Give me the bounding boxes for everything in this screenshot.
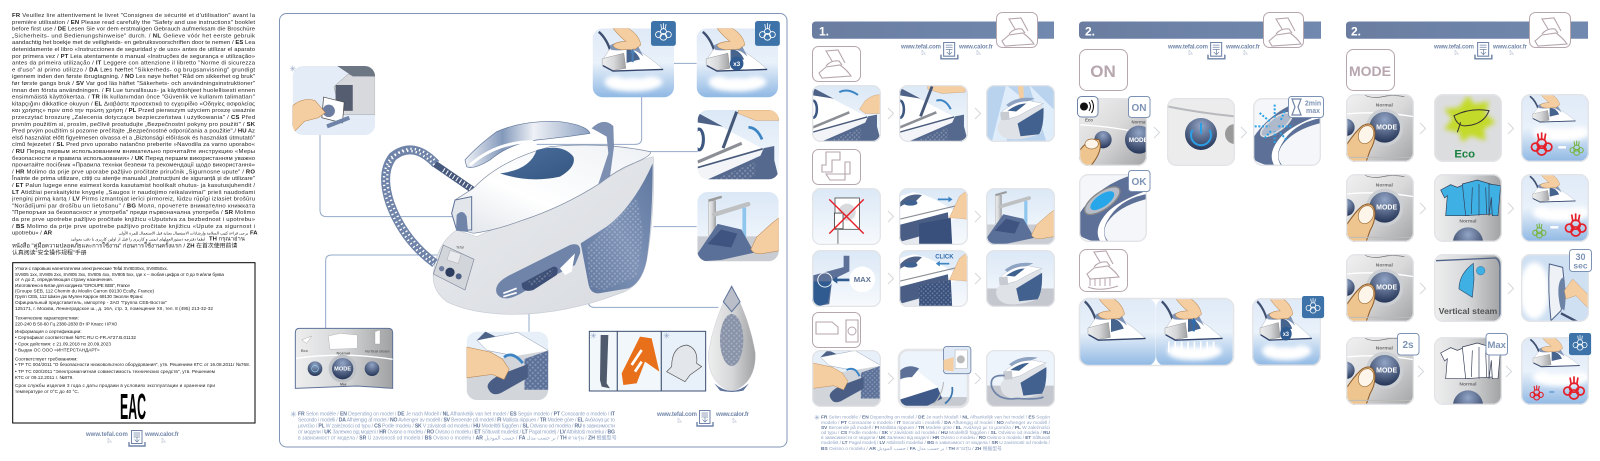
thumbnail: press mode: Normal xyxy=(1376,182,1394,188)
arrow xyxy=(1508,203,1514,214)
badge: ON: ON xyxy=(1132,103,1146,114)
panel: product overview frame xyxy=(280,14,787,447)
blue side stripe xyxy=(496,244,580,298)
thumbnail: hold mode xyxy=(1346,337,1414,405)
panel: multilingual safety notice: kitapçığını dikkatlice okuyun / EL Διαβάστε προσεκτικά το εγχειρίδιο «Οδηγίες ασφαλείας xyxy=(12,100,255,107)
panel: Russian compliance box: 220-240 В 50-60 Гц 2380-2830 Вт IP Класс I IPX0 xyxy=(15,322,117,326)
panel: multilingual safety notice: da pre prve upotrebe pažljivo pročitate knjižicu «Uputstva za bezbednost i upotrebu» xyxy=(12,217,256,223)
badge: ON xyxy=(1128,96,1150,118)
thumbnail: fill tank xyxy=(986,188,1055,245)
thumbnail: press power button: MODE xyxy=(1129,137,1148,144)
section 2 MODE: header bar: 2. xyxy=(1351,24,1361,38)
thumbnail: lifting flap, step 2 xyxy=(896,85,968,142)
badge: Max: Max xyxy=(1487,340,1507,351)
panel: multilingual safety notice: igennem inden den første ibrugtagning. / NO Les nøye heftet "Råd om sikkerhet og bruk" xyxy=(12,73,255,80)
panel: multilingual safety notice: „Sicherheits- und Bedienungshinweise" durch. / NL Gelieve vóór het eerste gebruik xyxy=(12,33,255,39)
panel: Russian compliance box: 125171, г. Москва, Ленинградское ш., д. 16А, стр. 3, помещение XII, тел. 8 (495) 213-32-32 xyxy=(15,306,213,311)
panel: multilingual safety notice: før første gangs bruk / SV Var god läs häftet "Säkerhets- och användningsinstruktioner" xyxy=(12,81,255,87)
panel: Russian compliance box: Утюги с паровым нагнетателем электрические Tefal SV8030xx, SV8050xx. xyxy=(15,266,168,271)
panel: Russian compliance box: SV805 1xx, SV805 2xx, SV805 3xx, SV805 4xx, SV805 5xx, где х – любая цифра от 0 до 9 и/или буква xyxy=(15,272,224,277)
icon: iron steaming xyxy=(1080,250,1128,292)
badge: 2s xyxy=(1398,334,1419,355)
websites: mode section: www.tefal.com xyxy=(1433,44,1474,50)
arrow xyxy=(1420,283,1426,294)
thumbnail: generator with cord xyxy=(986,350,1055,407)
thumbnail: press mode: MODE xyxy=(1376,204,1397,211)
thumbnail: press mode: MODE xyxy=(1376,284,1397,291)
thumbnail: turning dial xyxy=(467,332,548,400)
arrow xyxy=(975,108,980,119)
thumbnail: steam lower xyxy=(1521,94,1590,162)
thumbnail: press mode xyxy=(1346,174,1414,242)
section 1 footnote: SV Beroende på modell / FI Mallista riippuen / TR Modele göre / EL Ανάλογα με το μοντέλο / PL W zależności xyxy=(821,424,1050,431)
row: Max mode xyxy=(1346,333,1592,405)
panel: multilingual safety notice: przeczytać broszurę „Zalecenia dotyczące bezpieczeństwa i użytkowania" / CS Před xyxy=(12,115,255,121)
websites: left column xyxy=(85,430,180,446)
base control panel xyxy=(433,245,474,290)
icon: steam boost badge xyxy=(755,21,780,46)
thumbnail: power button lit xyxy=(1167,98,1235,166)
panel: multilingual safety notice: című fejezetet / SL Pred prvo uporabo natančno preberite »Navodila za varno uporabo« xyxy=(12,142,256,148)
panel: multilingual safety notice: első használat előtt figyelmesen olvassa el a „Biztonsági előírások és használati útmutató" xyxy=(12,135,255,141)
websites: overview panel: www.tefal.com xyxy=(656,412,697,418)
accessories xyxy=(589,331,706,391)
badge: 30 sec: 30 xyxy=(1575,252,1586,262)
badge: 2s: 2s xyxy=(1402,340,1414,351)
badge: Max xyxy=(1486,334,1508,355)
arrow xyxy=(1508,283,1514,294)
panel: multilingual safety notice: LT Atidžiai perskaitykite knygelę „Saugos ir naudojimo reikalavimai" prieš naudodami xyxy=(12,190,255,196)
base control panel: Tefal xyxy=(456,246,464,250)
thumbnail: steam higher xyxy=(1521,174,1590,242)
panel: multilingual safety notice: / ET Palun lugege enne esimest korda kasutamist hoolikalt ohutus- ja kasutusjuhendit / xyxy=(12,183,255,189)
thumbnail: remove tank xyxy=(899,188,968,245)
badge: 30 sec: sec xyxy=(1573,260,1588,270)
panel: multilingual safety notice: antes da primeira utilização / IT Leggere con attenzione il libretto "Norme di sicurezza xyxy=(12,61,256,67)
section 1: header bar: 1. xyxy=(819,24,829,38)
thumbnail: unlocking dial xyxy=(812,350,881,407)
thumbnail: press mode xyxy=(1346,94,1414,162)
panel: Russian compliance box: от A до Z, определяющая страну назначения. xyxy=(15,277,113,282)
thumbnail: plugging in xyxy=(899,347,971,407)
main footnote: от модели / UK Залежно від моделі / HR Ovisno o modelu / RO Ovisno o modelu / ET Sõltuvalt mudelist / LT Pagal modelį / LV Atbilstoši modeliui / BG xyxy=(298,430,615,436)
icon: MODE label: MODE xyxy=(1349,63,1391,79)
icon: max steam badge xyxy=(1569,333,1591,355)
panel: Russian compliance box: • ТР ТС 004/2011 "О безопасности низковольтного оборудования", утв. Решением КТС от 16.08.2011г №768. xyxy=(15,362,250,367)
panel: multilingual safety notice: before first use / DE Lesen Sie vor dem erstmaligen Gebrauch aufmerksam die Broschüre xyxy=(12,27,256,33)
water tank xyxy=(581,163,653,293)
icon: tank xyxy=(812,150,860,184)
badge: 2 min max: 2min xyxy=(1305,100,1321,108)
steam generator base xyxy=(433,157,654,314)
panel: multilingual safety notice: прочитайте посібник «Правила техніки безпеки та рекомендації щодо використання» xyxy=(12,162,256,169)
hose xyxy=(384,149,477,264)
thumbnail: indicator steady xyxy=(1079,174,1147,242)
panel: Russian compliance box: Соответствует требованиям: xyxy=(15,356,78,362)
panel: Russian compliance box: Изготовлено в Китае для холдинга "GROUPE SEB", France xyxy=(15,283,130,288)
thumbnail: filling tank at faucet xyxy=(697,192,779,261)
icon: ON label xyxy=(1080,50,1128,90)
iron handle xyxy=(465,121,614,184)
thumbnail: Vertical steam selected: Vertical steam xyxy=(1439,306,1498,316)
thumbnail: hold mode: MODE xyxy=(1376,367,1397,374)
panel: Russian compliance box: Срок службы изделия 3 года с даты продажи в условиях эксплуатации и хранении при xyxy=(15,383,215,388)
thumbnail: steam boost x3: x3 xyxy=(1283,332,1290,338)
thumbnail: Normal selected xyxy=(1434,174,1502,242)
panel: multilingual safety notice: يرجى قراءة كتيب السلامة وإرشادات الاستعمال بعناية قبل الاستعمال للمرة الأولى xyxy=(119,231,248,237)
panel: multilingual safety notice: aandachtig het boekje met de veiligheids- en gebruiksvoorschriften door te nemen / ES Lea xyxy=(12,40,256,46)
row: Normal mode xyxy=(1346,174,1589,242)
panel: multilingual safety notice: και χρήσης» πριν από την πρώτη χρήση / PL Przed pierwszym użyciem proszę uważnie xyxy=(12,107,256,114)
panel: multilingual safety notice: e d'uso" al primo utilizzo / DA Læs hæftet "Sikkerheds- og brugsanvisning" grundigt xyxy=(12,67,255,73)
panel: Russian compliance box: Информация о сертификации: xyxy=(15,329,82,334)
icon: MODE label xyxy=(1346,50,1394,90)
panel: Russian compliance box: • Срок действия: с 21.09.2018 по 20.09.2023 xyxy=(15,340,111,346)
panel: multilingual safety notice xyxy=(11,13,258,256)
thumbnail: press mode: Normal xyxy=(1376,262,1394,268)
panel: Russian compliance box: • Сертификат соответствия №ТС RU C-FR.АГ27.В.01132 xyxy=(15,335,136,340)
section 1 footnote: ✳ xyxy=(814,414,820,422)
main footnote xyxy=(290,410,617,442)
icon: beep sound xyxy=(1078,96,1098,117)
thumbnail: press power button: Normal xyxy=(1132,120,1146,125)
thumbnail: press power button xyxy=(1079,98,1153,166)
section 1 footnote: modelo / PT Consoante o modelo / IT Secondo i modelli / DA Afhængig af model / NO Avhenger av modell / xyxy=(821,420,1051,426)
thumbnail: maximum steam xyxy=(1521,337,1590,405)
badge: OK: OK xyxy=(1132,177,1147,188)
panel: multilingual safety notice: لطفا دفترچه دستورالعملهای ایمنی و کاربری را قبل از اولین کاربری با دقت بخوانید xyxy=(71,237,205,242)
icon: ON label: ON xyxy=(1090,62,1116,81)
control panel xyxy=(295,328,393,388)
arrow xyxy=(1154,127,1160,138)
panel: Russian compliance box: • Выдан ОС ООО «ИНТЕРСТАНДАРТ» xyxy=(15,348,100,352)
control panel: Max xyxy=(340,383,347,387)
control panel: Normal xyxy=(336,351,350,356)
panel: Russian compliance box: Групп СЕБ, 112 Шмэн дю Мулен Каррон 69130 Эколли Франс xyxy=(15,294,144,299)
main footnote: Secondo i modelli / DA Afhængig af model / NO Avhenger av modell / SV Beroende på modell / FI Mallista riippuen / TR Modele göre / EL Ανάλογα με το xyxy=(298,416,615,424)
star marker: ✳ xyxy=(289,65,296,74)
overview illustration: steam generator and callouts xyxy=(289,21,780,400)
badge: 2 min max: max xyxy=(1306,108,1320,115)
thumbnail: press mode: MODE xyxy=(1376,124,1397,131)
thumbnail: hold mode: Normal xyxy=(1376,345,1394,351)
panel: multilingual safety notice: หนังสือ "คู่มือความปลอดภัยและการใช้งาน" ก่อนการใช้งานครั้งแรก / ZH 在首次使用前请 xyxy=(12,239,237,249)
connector lines xyxy=(320,63,718,332)
iron rear cap xyxy=(452,197,472,232)
thumbnail: Eco selected xyxy=(1434,94,1502,162)
websites: mode section: www.calor.fr xyxy=(1492,44,1528,50)
panel: multilingual safety notice: Înainte de prima utilizare, citiți cu atenție manualul „Instrucțiuni de siguranță și de utilizare" xyxy=(11,175,255,182)
panel: multilingual safety notice: detenidamente el libro «Instrucciones de seguridad y de uso» antes de utilizar el aparato xyxy=(12,47,256,53)
panel: multilingual safety notice: Pred prvým použitím si pozorne prečítajte „Bezpečnostné odporúčania a použitie"./ HU Az xyxy=(12,129,255,135)
icon: hand on iron xyxy=(1530,12,1570,48)
arrow xyxy=(975,373,980,384)
section 2 ON: header bar xyxy=(1079,22,1321,39)
arrow xyxy=(1506,366,1512,377)
websites: section 2: www.tefal.com xyxy=(1167,44,1208,50)
panel: Russian compliance box xyxy=(13,263,255,427)
panel: Russian compliance box: Официальный представитель, импортёр - ЗАО "Группа СЕБ-Восток" xyxy=(15,299,167,305)
websites: left column: www.tefal.com xyxy=(85,432,128,438)
websites: section 2: www.calor.fr xyxy=(1225,44,1261,50)
panel: multilingual safety notice: / HR Molimo da prije prve uporabe pažljivo pročitate priručnik „Sigurnosne upute" / RO xyxy=(12,169,255,175)
thumbnail: indicator flashing xyxy=(1253,98,1321,166)
icon: iron on base xyxy=(812,46,860,82)
section 1 footnote: BS Ovisno o modelu / AR حسب الموديل / FA بر حسب مدل / TH ตามรุ่น / ZH 根据型号 xyxy=(821,445,1002,452)
control panel: MODE xyxy=(334,367,351,373)
websites: overview panel: www.calor.fr xyxy=(715,412,750,418)
panel: multilingual safety notice: безопасности и правила использования» / UK Перед першим використанням уважно xyxy=(12,156,256,162)
icon: steam boost badge xyxy=(1302,296,1324,318)
arrow xyxy=(888,211,894,222)
panel: multilingual safety notice: FR Veuillez lire attentivement le livret "Consignes de sécurité et d'utilisation" avant la xyxy=(12,13,256,19)
badge: 2 min max xyxy=(1288,96,1324,118)
panel: multilingual safety notice: prvním použitím si, prosím, pečlivě prostudujte „Bezpečnostní pokyny pro použití" / SK xyxy=(12,122,256,128)
thumbnail: press power button: Eco xyxy=(1085,117,1093,122)
accessories: ✳ xyxy=(663,331,670,340)
thumbnail: triple press burst xyxy=(697,28,778,97)
thumbnail: opening flap xyxy=(695,110,779,179)
panel: multilingual safety notice: TH กรุณาอ่าน xyxy=(209,236,245,243)
accessories: ✳ xyxy=(590,331,597,340)
panel: Russian compliance box: (Groupe SEB, 112 Chemin du Moulin Carron 69130 Ecully, France) xyxy=(15,288,154,294)
arrow xyxy=(888,273,894,284)
websites: overview panel xyxy=(656,410,750,426)
icon: steam badge xyxy=(651,21,676,46)
section 1: header bar xyxy=(812,22,1054,39)
panel: multilingual safety notice: įrenginį pirmą kartą / LV Pirms izmantojat ierīci pirmoreiz, lūdzu rūpīgi izlasiet brošūru xyxy=(12,197,255,203)
panel: multilingual safety notice: / BS Molimo da prije prve upotrebe pažljivo pročitate knjižicu «Upute za sigurnost i xyxy=(12,224,255,230)
panel: multilingual safety notice: FA xyxy=(250,231,258,237)
thumbnail: Eco selected: Eco xyxy=(1454,148,1475,160)
arrow xyxy=(975,273,980,284)
section 2 ON: header bar: 2. xyxy=(1085,24,1095,38)
section 1 footnote: od typu / CS Podle modelu / SK V závislosti od modelu / HU Modelltől függően / SL Odvisno od modela / RU xyxy=(821,430,1051,436)
section 1 footnote xyxy=(814,414,1051,452)
icon: plug in socket xyxy=(812,312,860,348)
main footnote: FR Selon modèle / EN Depending on model / DE Je nach Modell / NL Afhankelijk van het model / ES Según modelo / PT Consoante o modelo / IT xyxy=(298,412,616,418)
badge: 30 sec xyxy=(1570,250,1592,272)
websites: section 1: www.tefal.com xyxy=(900,44,941,50)
panel: multilingual safety notice: innan den första användningen. / FI Lue turvallisuus- ja käyttöohjeet huolellisesti ennen xyxy=(12,88,255,94)
badge: OK xyxy=(1128,170,1150,192)
websites: section 2 xyxy=(1167,43,1261,59)
panel: multilingual safety notice: 认真阅读“安全操作规程”手册 xyxy=(12,248,87,256)
control panel: Eco xyxy=(301,349,308,353)
websites: mode section xyxy=(1433,43,1528,59)
arrow xyxy=(1420,123,1426,134)
panel: multilingual safety notice: / RU Перед первым использованием внимательно прочитайте инструкцию «Меры xyxy=(12,148,255,155)
section 2 MODE: header bar xyxy=(1346,22,1588,39)
panel: multilingual safety notice: por primera vez / PT Leia atentamente o manual «Instruções de segurança e utilização» xyxy=(12,54,256,60)
main footnote: ✳ xyxy=(290,410,297,419)
icon: hand on iron xyxy=(1264,12,1304,48)
arrow xyxy=(1508,123,1514,134)
arrow xyxy=(1418,366,1424,377)
section 1 footnote: в зависимости от модели / UK Залежно від моделі / HR Ovisno o modelu / RO Ovisno o modelu / ET Sõltuvalt xyxy=(821,435,1051,441)
panel: Russian compliance box: температуре от 0°С до 40 °С. xyxy=(15,389,79,394)
main footnote: μοντέλο / PL W zależności od typu / CS Podle modelu / SK V závislosti od modelu / HU Modelltől függően / SL Odvisno od modela / RU в зависимости xyxy=(298,422,615,430)
thumbnail: maximum level xyxy=(812,250,881,307)
thumbnail: Max selected xyxy=(1434,337,1502,405)
arrow xyxy=(1241,127,1246,138)
soleplate iron xyxy=(708,285,755,392)
thumbnail: tank reinstalled xyxy=(986,250,1055,307)
arrow xyxy=(888,373,894,384)
thumbnail: iron without and with steam xyxy=(1079,298,1234,366)
main footnote: в зависимост от модела / SR U zavisnosti od modela / BS Ovisno o modelu / AR حسب الموديل / FA بر حسب مدل / TH ตามรุ่น / ZH 根据型号 xyxy=(298,434,617,442)
thumbnail: press mode xyxy=(1346,254,1414,322)
panel: multilingual safety notice: upotrebu» / AR xyxy=(12,231,53,237)
thumbnail: maximum level: MAX xyxy=(854,275,872,284)
thumbnail: press mode: Normal xyxy=(1376,102,1394,108)
websites: section 1 xyxy=(900,43,994,59)
row: Eco mode xyxy=(1337,94,1590,162)
thumbnail: unplugged socket xyxy=(812,188,881,245)
iron body xyxy=(452,145,650,233)
thumbnail: reinsert tank, click xyxy=(899,250,968,307)
thumbnail: Vertical steam selected xyxy=(1434,254,1502,322)
thumbnail: reinsert tank, click: CLICK xyxy=(935,255,954,261)
section 1 footnote: FR Selon modèle / EN Depending on model / DE Je nach Modell / NL Afhankelijk van het model / ES Según xyxy=(821,414,1050,420)
panel: multilingual safety notice: ensimmäistä käyttökertaa. / TR İlk kullanımdan önce "Güvenlik ve kullanım talimatları" xyxy=(12,94,255,101)
arrow xyxy=(975,211,980,222)
thumbnail: vertical iron steaming xyxy=(1519,254,1589,322)
websites: left column: www.calor.fr xyxy=(144,432,180,438)
panel: multilingual safety notice: première utilisation / EN Please read carefully the "Safety and use instructions" booklet xyxy=(12,20,255,26)
control panel: Vertical steam xyxy=(365,349,390,353)
thumbnail: opening flap, step 1 xyxy=(809,85,881,142)
thumbnail: Normal selected: Normal xyxy=(1459,218,1477,224)
section 1 footnote: mudelist / LT Pagal modelį / LV Atbilstoši modeliui / BG в зависимост от модела / SR U zavisnosti od modela / xyxy=(821,440,1051,446)
thumbnail: Max selected: Normal xyxy=(1459,381,1477,387)
thumbnail: move generator xyxy=(986,85,1055,142)
thumbnail: capsule removal xyxy=(293,66,375,135)
panel: Russian compliance box: • ТР ТС 020/2011 "Электромагнитная совместимость технических средств", утв. Решением xyxy=(15,369,215,374)
panel: multilingual safety notice: "Препоръки за безопасност и употреба" преди първоначална употреба / SR Molimo xyxy=(12,210,256,216)
panel: Russian compliance box: КТС от 09.12.2011 г. №879. xyxy=(15,375,74,380)
thumbnail: triple press burst: x3 xyxy=(733,61,741,68)
arrow xyxy=(1420,203,1426,214)
panel: Russian compliance box: Технические характеристики: xyxy=(15,316,79,320)
row: Vertical steam mode xyxy=(1337,250,1592,322)
icon: generator xyxy=(996,12,1038,48)
thumbnail: steam boost x3 xyxy=(1252,298,1321,366)
arrow xyxy=(888,108,894,119)
thumbnail: steam button xyxy=(593,28,674,97)
websites: section 1: www.calor.fr xyxy=(958,44,994,50)
panel: multilingual safety notice: "Norādījumi par drošību un lietošanu" / BG Моля, прочетете внимателно книжката xyxy=(12,203,256,209)
panel: Russian compliance box: EAC xyxy=(120,386,146,427)
